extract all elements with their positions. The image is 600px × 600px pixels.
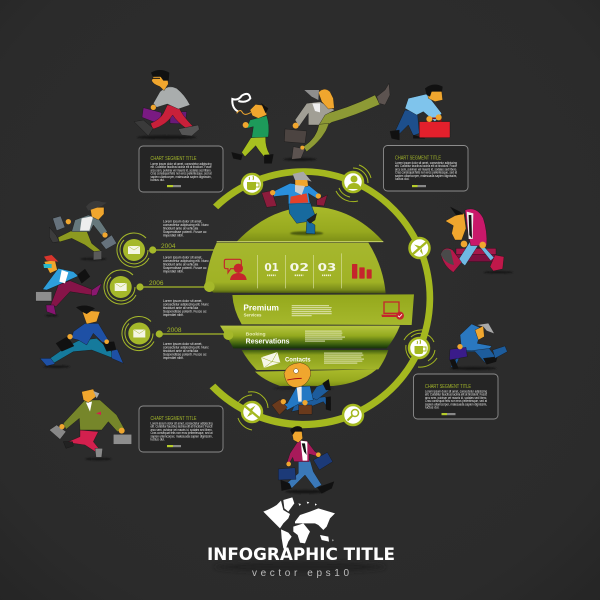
panel: chart segment top left: Cras consequat felis non eros pellentesque, sed at [150, 172, 212, 176]
panel: chart segment top right: Lorem ipsum dolor sit amet, consectetur adipiscing [395, 161, 457, 165]
world map [263, 497, 335, 549]
text block: above 2004: Lorem ipsum dolor sit amet, [163, 220, 202, 224]
panel: chart segment right: CHART SEGMENT TITLE [425, 384, 471, 390]
panel: chart segment bottom left: arcu sem, pulvinar vel mauris id, sodales sed libero. [150, 428, 213, 432]
band: numbers: 03 [318, 261, 336, 274]
icon: envelope [261, 352, 280, 368]
timeline node 2004: 2004 [161, 243, 176, 250]
band: contacts: Contacts [285, 358, 311, 364]
panel: chart segment top right [384, 146, 468, 191]
panel: chart segment top left: CHART SEGMENT TITLE [150, 156, 197, 162]
panel: chart segment top right: luctus dui. [395, 177, 409, 181]
character: man with red hair [36, 255, 102, 317]
band: numbers [204, 242, 386, 293]
panel: chart segment right: elit. Curabitur faucibus lacinia elit at tincidunt. Fusce [425, 393, 487, 397]
character: man with red case [390, 85, 450, 140]
panel: chart segment bottom left: sapien ullamcorper, malesuada sapien dignissim, [150, 434, 213, 438]
text block: below 2008: Lorem ipsum dolor sit amet, [163, 342, 202, 346]
panel: chart segment top right: sapien ullamcorper, malesuada sapien dignissim, [395, 174, 457, 178]
man with pipe [232, 94, 273, 163]
band: premium services: Services [244, 313, 262, 318]
text block: below 2008: Suspendisse potenti. Fusce ac [163, 352, 207, 356]
panel: chart segment top right: elit. Curabitur faucibus lacinia elit at tincidunt. Fusce [395, 164, 457, 168]
character: man with hat [49, 201, 117, 260]
timeline: 2004 2006 2008 [104, 233, 224, 351]
ring icon: magnifier [343, 405, 363, 425]
character: man with purple bags [134, 70, 199, 139]
subtitle: vector eps10 [252, 568, 349, 579]
panel: chart segment top left: luctus dui. [150, 178, 165, 182]
band: premium services: Premium [243, 303, 279, 313]
text block: above 2008: Lorem ipsum dolor sit amet, [163, 299, 202, 303]
ring icon: plane right [410, 238, 430, 258]
panel: chart segment bottom left: luctus dui. [150, 438, 165, 442]
character: man with pipe and old man leaping [232, 83, 390, 163]
text block: above 2008: consectetur adipiscing elit. Nunc [163, 302, 209, 306]
panel: chart segment bottom left: Cras consequat felis non eros pellentesque, sed at [150, 431, 213, 435]
panel: chart segment bottom left: CHART SEGMENT TITLE [150, 416, 197, 422]
panel: chart segment top right: arcu sem, pulvinar vel mauris id, sodales sed libero. [395, 167, 457, 171]
character: man in magenta blazer at bottom [278, 426, 334, 494]
character: pink coat man [441, 207, 513, 274]
panel: chart segment right: sapien ullamcorper, malesuada sapien dignissim, [425, 402, 487, 406]
band: contacts [242, 350, 388, 386]
panel: chart segment right: arcu sem, pulvinar vel mauris id, sodales sed libero. [425, 396, 487, 400]
text block: above 2008: imperdiet nibh. [163, 313, 184, 317]
panel: chart segment right [414, 374, 498, 419]
central disk [204, 207, 414, 386]
panel: chart segment bottom left: Lorem ipsum dolor sit amet, consectetur adipiscing [150, 422, 213, 426]
ring icon: coffee [242, 174, 262, 194]
text block: above 2008: tincidunt ante at vehicula [163, 306, 198, 310]
band: numbers: 02 [290, 261, 309, 274]
panel: chart segment top right: Cras consequat felis non eros pellentesque, sed at [395, 171, 457, 175]
text block: above 2008: Suspendisse potenti. Fusce ac [163, 310, 207, 314]
character: grey haired man with blue coat [449, 323, 507, 370]
panel: chart segment right: luctus dui. [425, 406, 439, 410]
text block: above 2004: imperdiet nibh. [163, 234, 184, 238]
character: bald man on bottom of disk [272, 363, 333, 415]
text block: below 2008 [163, 342, 209, 360]
text block: above 2004: Suspendisse potenti. Fusce ac [163, 230, 207, 234]
title shadow [215, 562, 385, 572]
text block: below 2004: consectetur adipiscing elit. Nunc [163, 259, 209, 263]
old man leaping [283, 83, 390, 161]
text block: above 2004: tincidunt ante at vehicula [163, 226, 198, 230]
panel: chart segment top left: Lorem ipsum dolor sit amet, consectetur adipiscing [150, 162, 212, 166]
text block: below 2008: consectetur adipiscing elit. Nunc [163, 346, 209, 350]
text block: below 2004: tincidunt ante at vehicula [163, 262, 198, 266]
text block: below 2008: tincidunt ante at vehicula [163, 349, 198, 353]
text block: below 2004 [163, 256, 209, 274]
band: booking reservations: Reservations [246, 338, 290, 345]
band: numbers: 01 [264, 261, 279, 274]
timeline node 2006: 2006 [149, 280, 164, 287]
icon: person with speech bubble [224, 259, 247, 280]
character: man in blue running [40, 306, 123, 368]
text block: below 2004: Lorem ipsum dolor sit amet, [163, 256, 202, 260]
band: booking reservations: Booking [246, 331, 266, 337]
panel: chart segment top left: sapien ullamcorper, malesuada sapien dignissim, [150, 175, 212, 179]
icon: bar chart [352, 264, 372, 279]
text block: below 2004: Suspendisse potenti. Fusce ac [163, 266, 207, 270]
ring icon: person [336, 165, 371, 202]
text block: below 2008: imperdiet nibh. [163, 356, 184, 360]
text block: above 2004 [163, 220, 209, 238]
panel: chart segment right: Cras consequat felis non eros pellentesque, sed at [425, 399, 487, 403]
icon: laptop with check [381, 302, 404, 320]
timeline node 2008: 2008 [167, 327, 182, 334]
band: booking reservations [220, 326, 400, 348]
character: olive suit man [49, 389, 132, 460]
ring icon: plane bottom left [236, 392, 268, 430]
character: scientist on top of disk [262, 172, 327, 235]
panel: chart segment top left: elit. Curabitur faucibus lacinia elit at tincidunt. Fusce [150, 165, 212, 169]
panel: chart segment top left [139, 146, 223, 192]
panel: chart segment bottom left [139, 406, 223, 452]
panel: chart segment bottom left: elit. Curabitur faucibus lacinia elit at tincidunt. Fusce [150, 425, 213, 429]
panel: chart segment top right: CHART SEGMENT TITLE [395, 156, 441, 162]
top cap segment [237, 207, 383, 242]
title: INFOGRAPHIC TITLE [207, 545, 395, 564]
text block: above 2008 [163, 299, 209, 317]
band: premium services [232, 294, 414, 325]
text block: below 2004: imperdiet nibh. [163, 270, 184, 274]
text block: above 2004: consectetur adipiscing elit. Nunc [163, 223, 209, 227]
ring icon: coffee right [404, 330, 437, 367]
panel: chart segment top left: arcu sem, pulvinar vel mauris id, sodales sed libero. [150, 168, 212, 172]
outer ring [210, 168, 433, 428]
panel: chart segment right: Lorem ipsum dolor sit amet, consectetur adipiscing [425, 390, 487, 394]
